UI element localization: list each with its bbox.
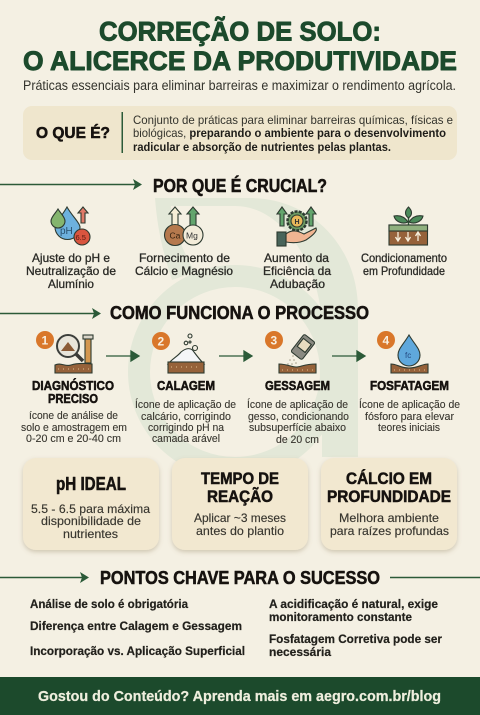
card: ph ideal: nutrientes bbox=[63, 527, 118, 541]
step 1 description: solo e amostragem em bbox=[21, 422, 127, 434]
icon: hand and gear bbox=[277, 207, 316, 246]
heading: como funciona: COMO FUNCIONA O PROCESSO bbox=[110, 303, 369, 323]
label: ph: Neutralização de bbox=[26, 264, 116, 278]
card: ph ideal: 5.5 - 6.5 para máxima bbox=[31, 502, 150, 516]
arrow: section 2 bbox=[0, 308, 101, 319]
footer: Gostou do Conteúdo? Aprenda mais em aegro.com.br/blog bbox=[38, 688, 441, 705]
heading: por que é crucial: POR QUE É CRUCIAL? bbox=[153, 175, 327, 196]
key points right: monitoramento constante bbox=[269, 610, 412, 624]
heading: o que é: O QUE É? bbox=[36, 123, 110, 142]
heading: diagnóstico bbox=[32, 378, 114, 406]
step 1 description: ícone de análise de bbox=[29, 410, 118, 422]
label: fertilizer efficiency bbox=[263, 251, 331, 291]
arrow: section 1 bbox=[0, 179, 142, 190]
icon: ph drop: pH bbox=[60, 226, 73, 237]
card: ph ideal: pH IDEAL bbox=[56, 474, 126, 494]
step 1 description bbox=[21, 410, 127, 445]
background watermark bbox=[139, 198, 358, 468]
icon: calcium and magnesium: Mg bbox=[186, 230, 198, 240]
key points right: necessária bbox=[269, 645, 331, 659]
step 4 icon bbox=[377, 331, 428, 373]
subtitle: Práticas essenciais para eliminar barreiras e maximizar o rendimento agrícola. bbox=[23, 78, 456, 93]
step 2 description: camada arável bbox=[152, 433, 220, 445]
step 2 icon: 2 bbox=[158, 334, 164, 348]
step 3 description: subsuperfície abaixo bbox=[249, 422, 346, 434]
definition text bbox=[133, 113, 453, 154]
step 4 description: Ícone de aplicação de bbox=[359, 398, 460, 411]
card: tempo de reação: TEMPO DE bbox=[201, 469, 279, 488]
panel: o que é bbox=[23, 106, 457, 160]
step 4 description: fósforo para elevar bbox=[365, 411, 454, 423]
arrow: step 2 to 3 bbox=[219, 351, 252, 361]
card: tempo de reação: REAÇÃO bbox=[207, 486, 273, 506]
definition text: radicular e absorção de nutrientes pelas plantas. bbox=[133, 140, 391, 154]
key points left: Diferença entre Calagem e Gessagem bbox=[30, 619, 242, 633]
label: fertilizer efficiency: Eficiência da bbox=[263, 264, 331, 278]
step 1 icon: 1 bbox=[42, 334, 48, 348]
label: ph: Ajuste do pH e bbox=[32, 251, 110, 265]
key points left: Incorporação vs. Aplicação Superficial bbox=[30, 644, 245, 658]
key points right: Fosfatagem Corretiva pode ser bbox=[269, 632, 442, 646]
label: calcium bbox=[135, 251, 233, 278]
step 1 icon bbox=[36, 331, 93, 373]
heading: pontos chave: PONTOS CHAVE PARA O SUCESSO bbox=[100, 568, 380, 588]
title: O ALICERCE DA PRODUTIVIDADE bbox=[23, 46, 457, 76]
arrow: step 1 to 2 bbox=[106, 351, 139, 361]
title: CORREÇÃO DE SOLO: bbox=[99, 16, 381, 46]
card: tempo de reação: antes do plantio bbox=[196, 524, 284, 538]
icon: plant and soil bbox=[389, 207, 428, 245]
step 4 description bbox=[359, 398, 460, 434]
heading: gessagem: GESSAGEM bbox=[265, 378, 330, 393]
icon: calcium and magnesium: Ca bbox=[170, 230, 181, 240]
title bbox=[23, 16, 457, 76]
heading: diagnóstico: PRECISO bbox=[48, 391, 98, 406]
step 3 icon: 3 bbox=[270, 334, 278, 348]
step 4 icon: 4 bbox=[382, 334, 390, 348]
label: calcium: Cálcio e Magnésio bbox=[135, 264, 233, 278]
card: cálcio em profundidade: Melhora ambiente bbox=[339, 511, 439, 525]
step 3 description: gesso, condicionando bbox=[248, 411, 349, 423]
card: ph ideal bbox=[23, 458, 159, 550]
card: cálcio em profundidade: CÁLCIO EM bbox=[346, 469, 432, 488]
arrow: step 3 to 4 bbox=[332, 351, 365, 361]
heading: calagem: CALAGEM bbox=[157, 378, 215, 393]
step 2 icon bbox=[152, 332, 204, 373]
step 4 description: teores iniciais bbox=[378, 422, 440, 434]
label: fertilizer efficiency: Adubação bbox=[270, 277, 325, 291]
label: ph bbox=[26, 251, 116, 291]
definition text: biológicas, preparando o ambiente para o desenvolvimento bbox=[133, 126, 446, 140]
card: tempo de reação bbox=[172, 458, 308, 550]
step 2 description: calcário, corrigindo bbox=[141, 411, 231, 423]
label: calcium: Fornecimento de bbox=[139, 251, 230, 265]
benefit labels bbox=[26, 251, 447, 291]
footer bbox=[0, 677, 480, 715]
key points left bbox=[30, 597, 245, 658]
icon: ph drop: 6.5 bbox=[76, 233, 86, 242]
heading: fosfatagem: FOSFATAGEM bbox=[370, 378, 449, 393]
card: cálcio em profundidade bbox=[321, 458, 457, 550]
definition text: Conjunto de práticas para eliminar barreiras químicas, físicas e bbox=[133, 113, 453, 127]
arrow: section 3 bbox=[0, 572, 480, 583]
step 3 icon bbox=[265, 331, 316, 373]
key points right: A acidificação é natural, exige bbox=[269, 597, 438, 611]
step 3 description: Ícone de aplicação de bbox=[247, 398, 348, 411]
step 4 icon: fc bbox=[405, 351, 411, 360]
card: tempo de reação: Aplicar ~3 meses bbox=[194, 511, 286, 525]
card: cálcio em profundidade: para raízes profundas bbox=[330, 524, 449, 538]
step 2 description: Ícone de aplicação de bbox=[135, 398, 236, 411]
icon: calcium and magnesium bbox=[164, 207, 203, 246]
label: depth bbox=[361, 251, 447, 278]
label: fertilizer efficiency: Aumento da bbox=[264, 251, 329, 265]
heading: diagnóstico: DIAGNÓSTICO bbox=[32, 378, 114, 393]
step 3 description bbox=[247, 398, 349, 446]
step 2 description: corrigindo pH na bbox=[148, 422, 225, 434]
icon: ph drop bbox=[51, 207, 90, 245]
card: ph ideal: disponibilidade de bbox=[41, 514, 141, 528]
key points right bbox=[269, 597, 442, 659]
label: depth: Condicionamento bbox=[361, 251, 447, 265]
label: ph: Alumínio bbox=[48, 277, 94, 291]
step 1 description: 0-20 cm e 20-40 cm bbox=[26, 433, 121, 445]
card: cálcio em profundidade: PROFUNDIDADE bbox=[327, 487, 451, 506]
step 3 description: de 20 cm bbox=[276, 434, 319, 446]
step 2 description bbox=[135, 398, 236, 445]
step headings bbox=[32, 378, 449, 406]
icon: hand and gear: H bbox=[294, 219, 300, 226]
label: depth: em Profundidade bbox=[363, 264, 445, 278]
key points left: Análise de solo é obrigatória bbox=[30, 597, 188, 611]
